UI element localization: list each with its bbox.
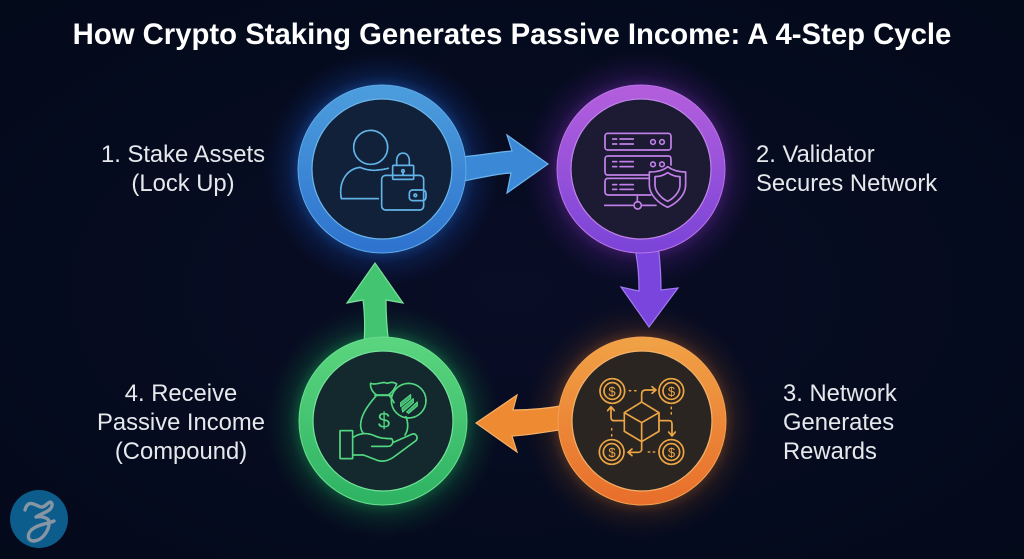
coin symbols: [608, 384, 676, 460]
icon: cube with coins: [599, 379, 684, 464]
step 3 node: orange ring with arrow: [476, 337, 726, 505]
arrow: stake to validator: [458, 135, 548, 193]
label: step 2: [756, 141, 938, 197]
title: How Crypto Staking Generates Passive Income: A 4-Step Cycle: [73, 18, 951, 51]
step 1 node: blue ring with arrow: [298, 85, 548, 253]
arrow: network to rewards: [476, 395, 566, 452]
label: step 4: (Compound): [115, 438, 247, 465]
coin symbols: $: [608, 384, 616, 399]
icon: user with lock and wallet: [341, 130, 426, 210]
step 2 node: purple ring with arrow: [557, 85, 725, 327]
label: step 3: Generates: [783, 409, 894, 436]
icon: server with shield: [605, 133, 686, 209]
coin symbols: $: [608, 445, 616, 460]
step 4 node: green ring with arrow: [299, 263, 467, 505]
label: step 4: 4. Receive: [125, 380, 237, 407]
label: step 4: Passive Income: [97, 409, 265, 436]
label: step 4: [97, 380, 265, 465]
icon: money bag in hand with token: [340, 382, 426, 461]
label: step 2: Secures Network: [756, 170, 937, 197]
label: step 3: 3. Network: [783, 380, 897, 407]
logo: circular brand badge: [10, 490, 68, 548]
label: step 3: Rewards: [783, 438, 877, 465]
coin symbols: $: [668, 384, 676, 399]
label: step 3: [783, 380, 897, 465]
label: step 1: [101, 141, 265, 197]
icon: dollar sign: $: [378, 408, 390, 433]
label: step 2: 2. Validator: [756, 141, 875, 168]
label: step 1: 1. Stake Assets: [101, 141, 265, 168]
coin symbols: $: [668, 445, 676, 460]
arrow: income back to stake: [347, 263, 403, 345]
label: step 1: (Lock Up): [131, 170, 235, 197]
arrow: validator to network: [621, 245, 678, 327]
